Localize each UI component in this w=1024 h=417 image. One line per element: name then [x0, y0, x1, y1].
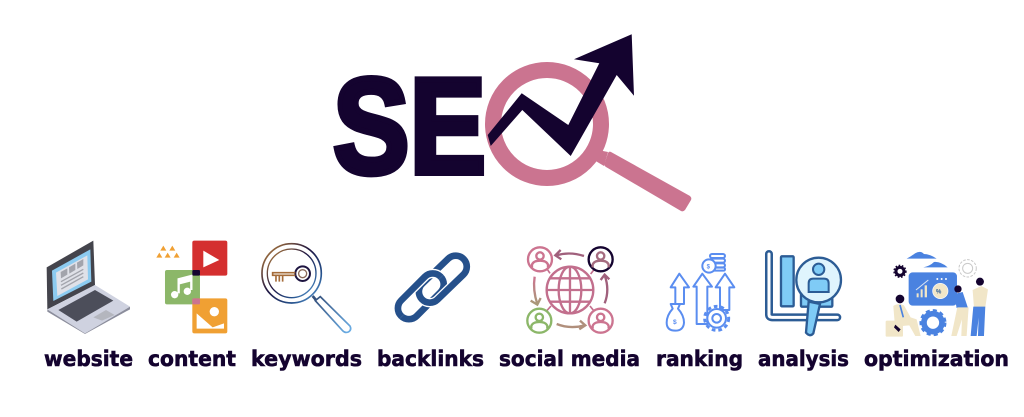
dashboard screen: % [936, 289, 942, 295]
icon: laptop [47, 241, 130, 334]
icon: ranking [667, 254, 734, 331]
small gears [894, 260, 976, 277]
coins: $ [707, 264, 711, 270]
icon: analysis chart [769, 254, 841, 335]
icon: content [156, 241, 227, 333]
clouds [907, 252, 948, 267]
label: ranking: ranking [656, 347, 743, 371]
money bag: $ [673, 319, 677, 326]
arrows [531, 250, 609, 329]
label: analysis: analysis [758, 347, 849, 371]
SEO logo [333, 34, 691, 211]
rising arrow [488, 34, 634, 156]
person pointing [949, 285, 969, 336]
label: social media: social media [499, 347, 640, 371]
person: top right [589, 247, 613, 271]
person: bottom right [589, 309, 613, 333]
arrows [671, 274, 734, 324]
globe [546, 267, 595, 313]
labels [44, 347, 1009, 371]
person seated [886, 295, 921, 337]
label: keywords: keywords [251, 347, 362, 371]
person: bottom left [527, 309, 551, 333]
label: optimization: optimization [864, 347, 1009, 371]
person: top left [528, 247, 552, 271]
title letters SE: SE [333, 50, 486, 202]
label: backlinks: backlinks [377, 347, 484, 371]
icon: optimization team [886, 252, 988, 337]
icon: backlinks chain [393, 251, 471, 324]
magnifier [493, 70, 691, 211]
person thinking [971, 278, 988, 336]
icon: keywords magnifier [262, 244, 351, 332]
gear [705, 306, 729, 330]
icon: social media network [527, 247, 613, 333]
label: website: website [44, 347, 133, 371]
label: content: content [148, 347, 236, 371]
large gear [921, 311, 945, 335]
